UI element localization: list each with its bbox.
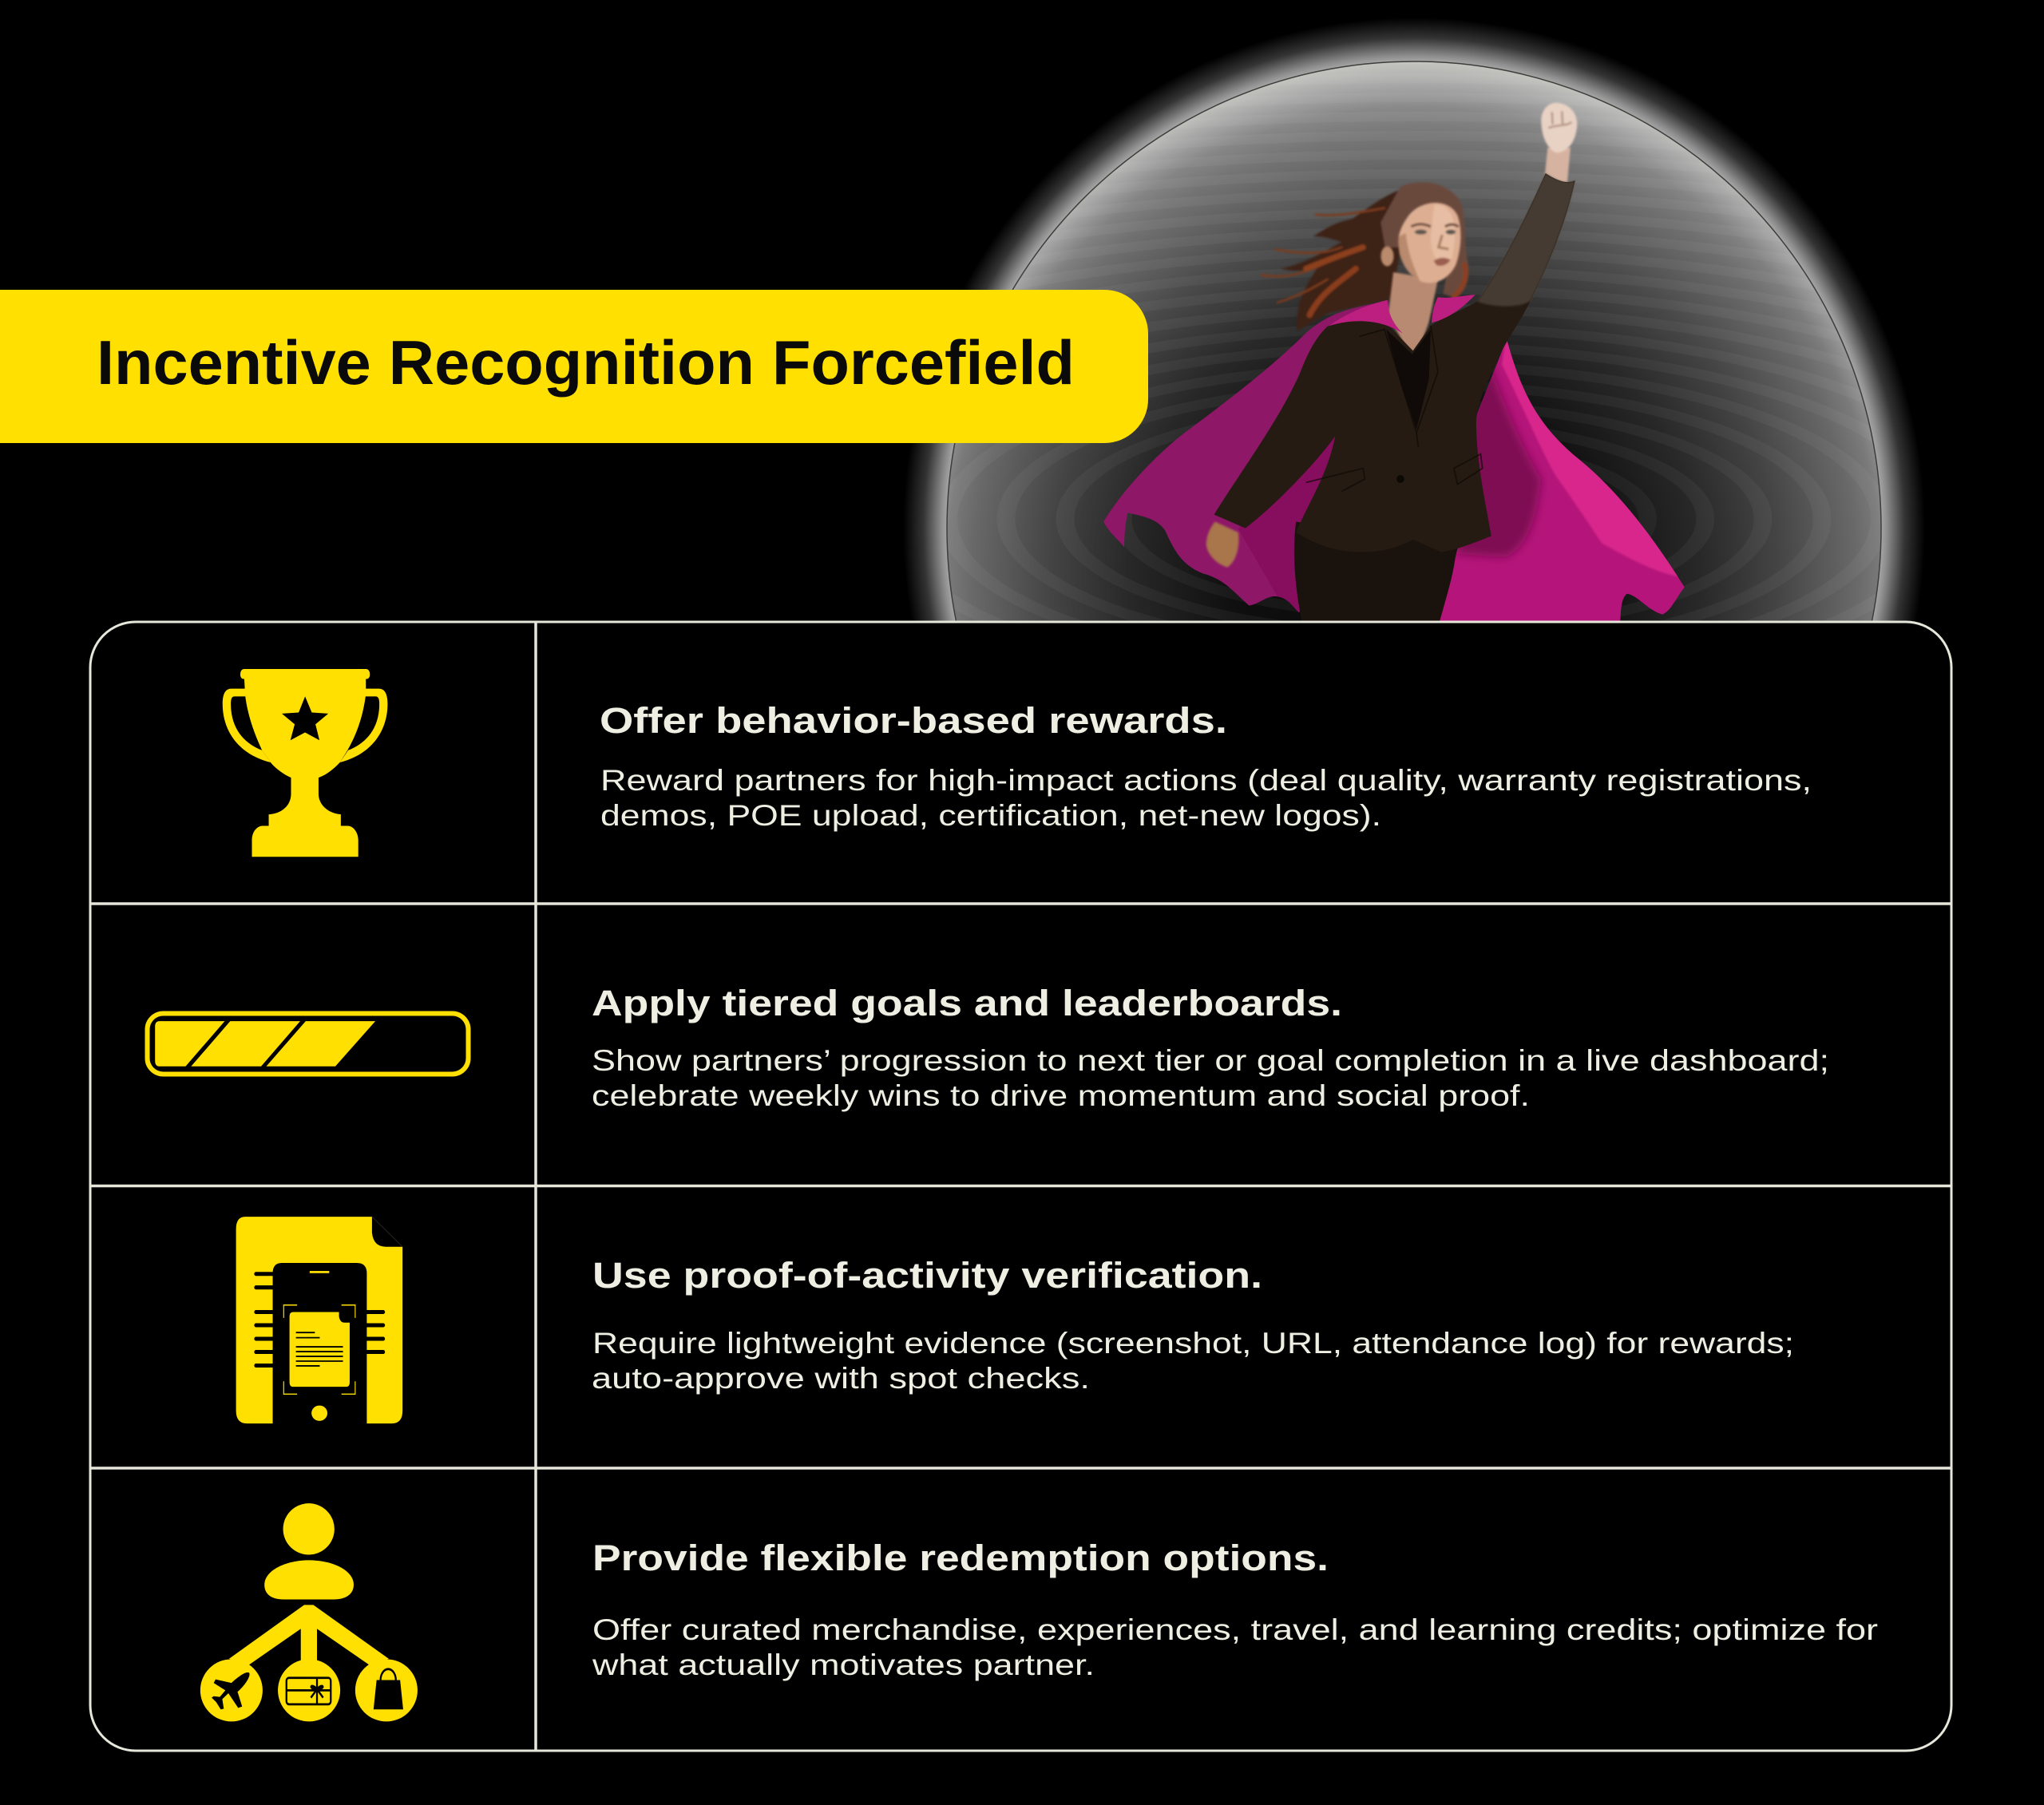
superhero woman with magenta cape — [1103, 103, 1705, 628]
row 4: flexible redemption options — [200, 1503, 1878, 1721]
upper sleeve translucent — [1477, 173, 1575, 307]
cape right wing — [1440, 341, 1685, 621]
row 3 description: Require lightweight evidence (screenshot, URL, attendance log) for rewards; — [592, 1327, 1794, 1360]
icon: progress bar — [147, 1014, 468, 1075]
lapel lines — [1306, 326, 1483, 492]
face — [1380, 203, 1460, 283]
ear — [1380, 246, 1394, 266]
cape left wing — [1103, 300, 1392, 612]
row 1: behavior-based rewards — [223, 669, 1812, 857]
neck and chest — [1388, 272, 1438, 362]
row 1 description: demos, POE upload, certification, net-new logos). — [600, 799, 1381, 832]
row 3: proof-of-activity verification — [236, 1217, 1794, 1423]
shirt — [1386, 329, 1431, 429]
cape right shadow — [1456, 358, 1541, 557]
row 1 description — [600, 764, 1812, 832]
icon: person with redemption choices — [200, 1503, 418, 1721]
row 2 heading: Apply tiered goals and leaderboards. — [592, 983, 1342, 1023]
icon: trophy — [223, 669, 387, 857]
row 2 description: Show partners’ progression to next tier or goal completion in a live dashboard; — [592, 1044, 1829, 1077]
row 3 description: auto-approve with spot checks. — [592, 1362, 1090, 1395]
row 2 description: celebrate weekly wins to drive momentum and social proof. — [592, 1079, 1530, 1112]
jacket button — [1396, 475, 1404, 483]
title text: Incentive Recognition Forcefield — [97, 327, 1075, 398]
cape right highlight — [1501, 341, 1678, 578]
row 4 description — [592, 1613, 1878, 1681]
title banner — [0, 290, 1148, 443]
row 4 description: what actually motivates partner. — [592, 1649, 1095, 1681]
raised forearm — [1545, 148, 1571, 187]
row 1 description: Reward partners for high-impact actions (deal quality, warranty registrations, — [600, 764, 1812, 797]
row 1 heading: Offer behavior-based rewards. — [600, 700, 1227, 741]
trousers — [1294, 522, 1456, 625]
row 3 heading: Use proof-of-activity verification. — [592, 1255, 1262, 1296]
row 4 heading: Provide flexible redemption options. — [592, 1538, 1329, 1578]
row 2: tiered goals and leaderboards — [147, 983, 1829, 1112]
brows, eyes, nose and lips — [1411, 224, 1459, 227]
icon: document and phone scan — [236, 1217, 402, 1423]
cape left inner fold — [1238, 437, 1335, 613]
row 2 description — [592, 1044, 1829, 1112]
row 4 description: Offer curated merchandise, experiences, travel, and learning credits; optimize for — [592, 1613, 1878, 1646]
jacket — [1214, 173, 1575, 552]
table frame — [90, 622, 1951, 1751]
raised fist — [1541, 103, 1577, 153]
cape collar — [1329, 295, 1476, 334]
lowered hand — [1206, 522, 1238, 568]
forcefield sphere — [906, 21, 1922, 621]
flowing hair — [1262, 182, 1468, 331]
row 3 description — [592, 1327, 1794, 1395]
